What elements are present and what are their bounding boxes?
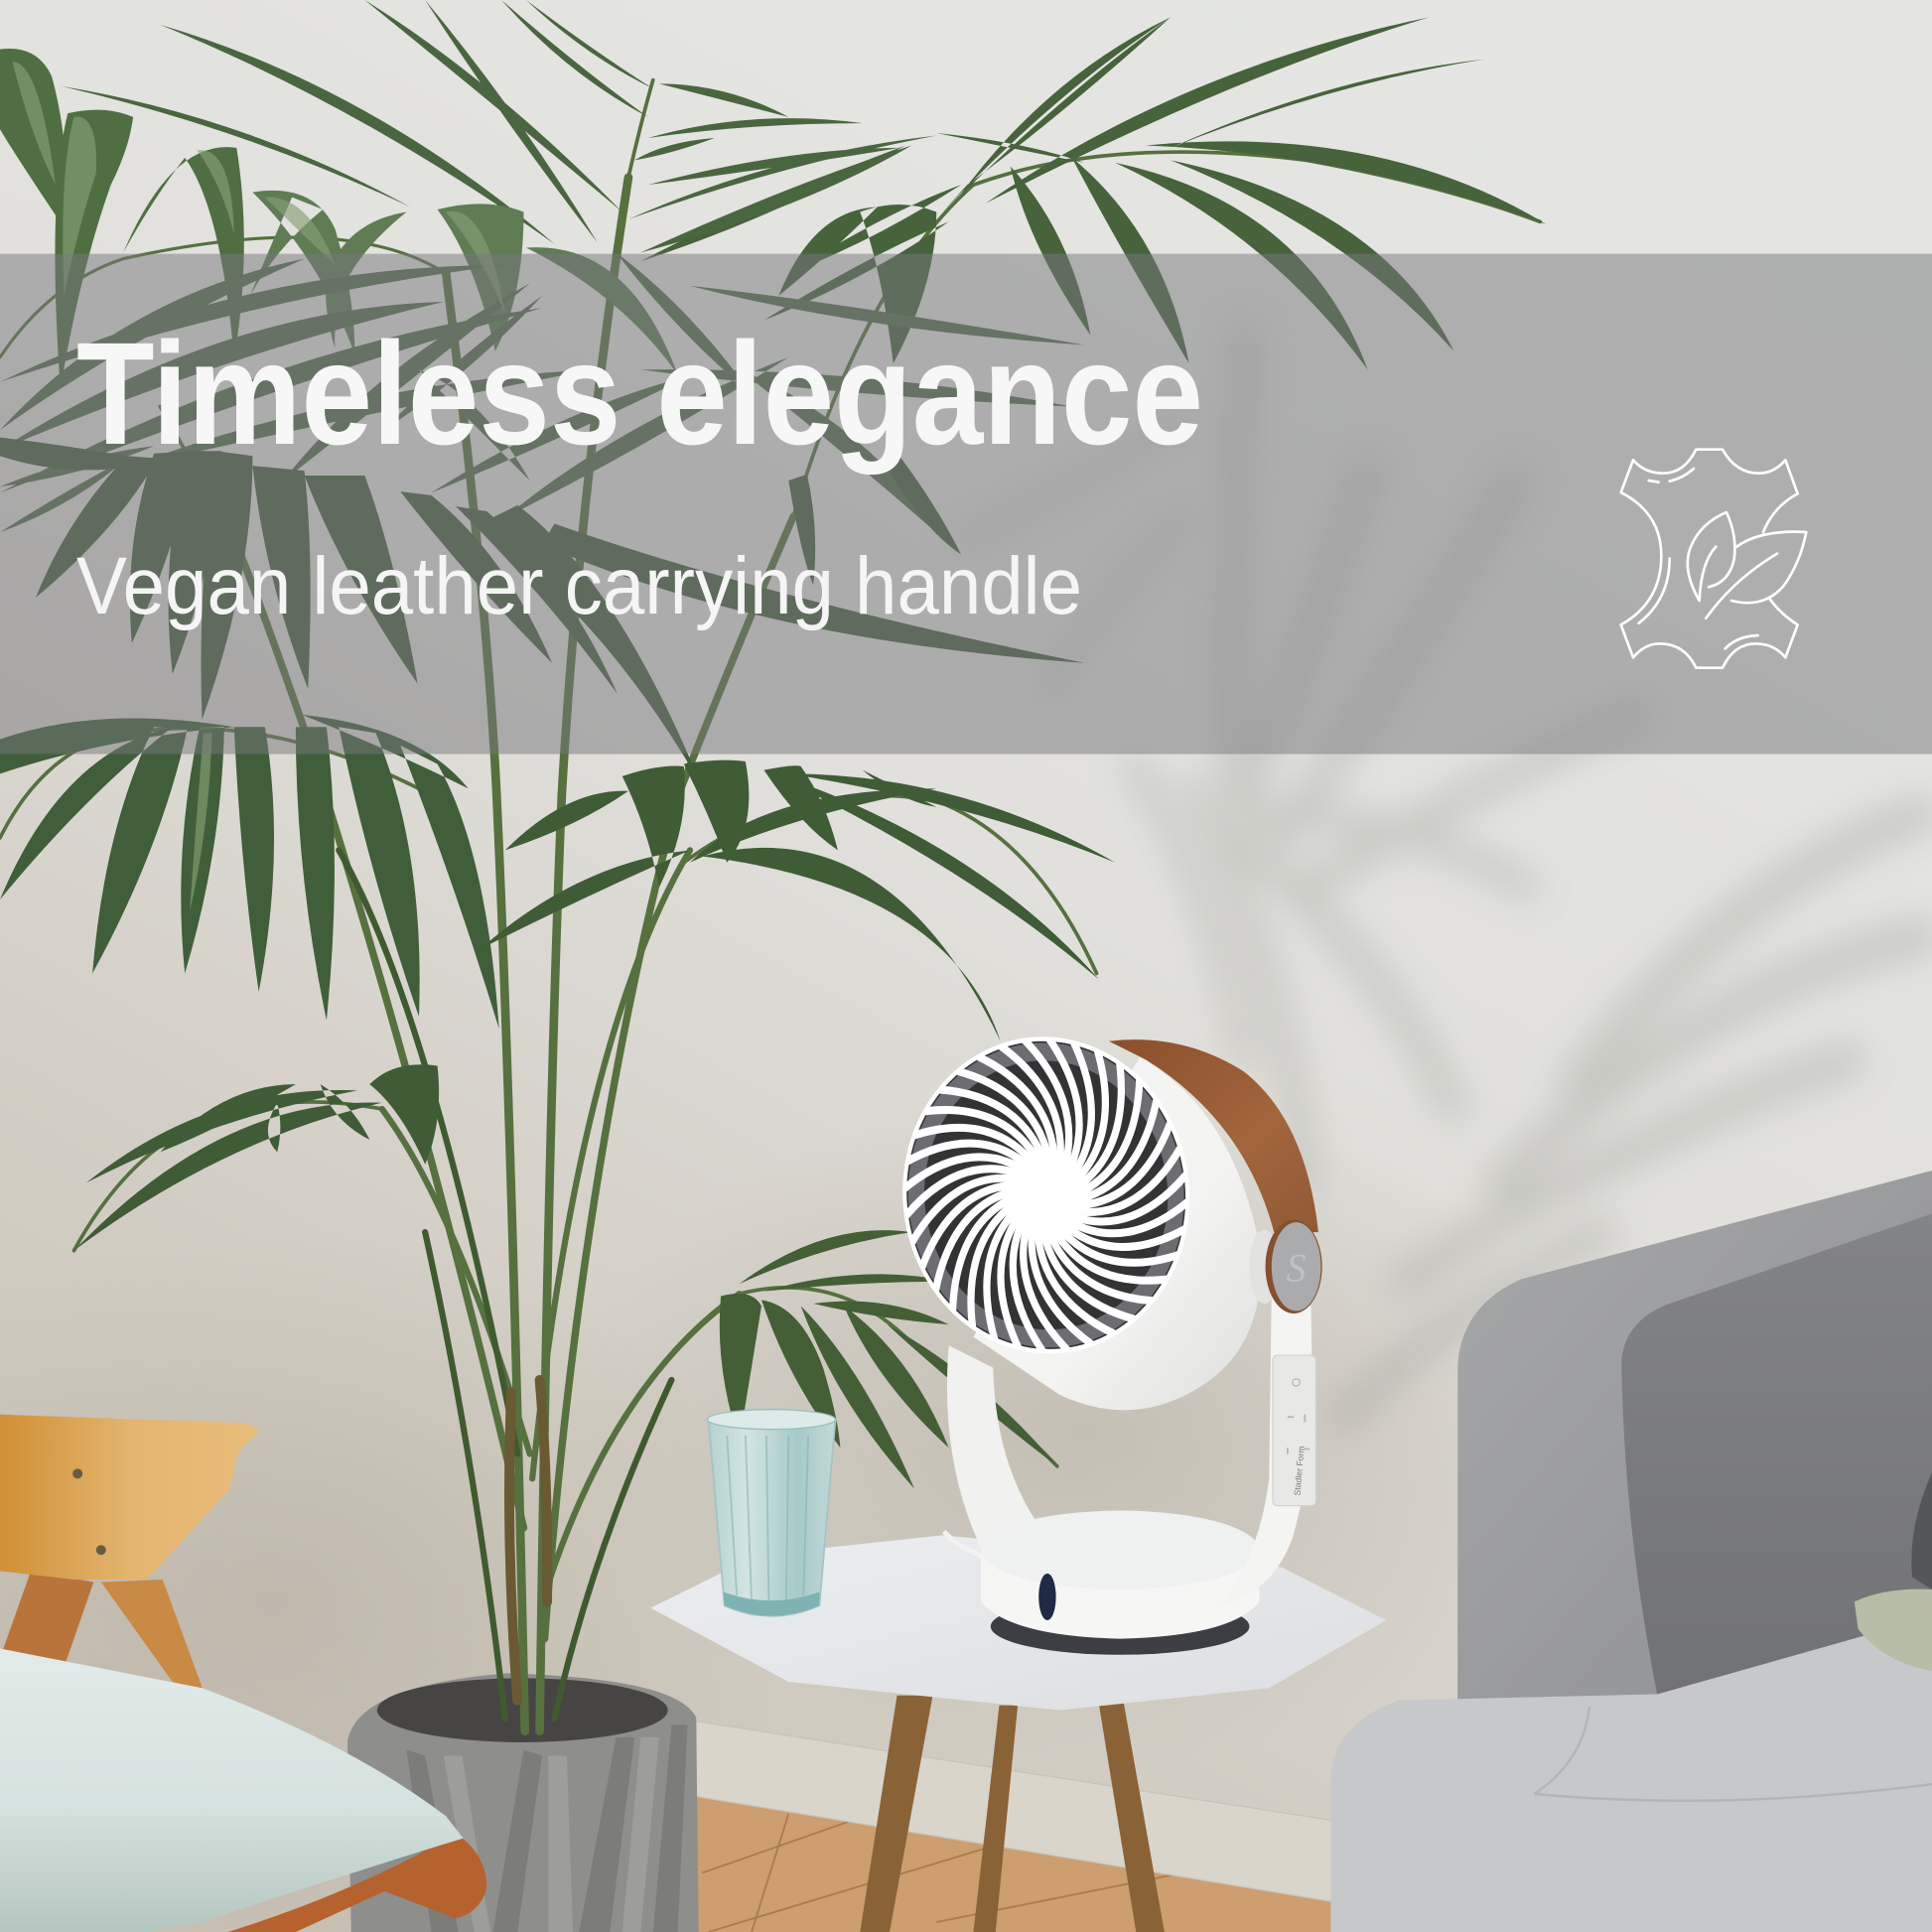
water glass	[707, 1410, 835, 1616]
frond: low centre	[720, 1230, 1057, 1488]
chair	[0, 1415, 486, 1932]
icon: leather hide with leaves	[1621, 450, 1806, 668]
base	[981, 1550, 1259, 1639]
leather strap	[1109, 1039, 1318, 1232]
sofa	[1330, 1171, 1932, 1932]
frond: top right	[640, 17, 1547, 369]
remote control	[1273, 1355, 1315, 1506]
frond: upper left droop	[0, 49, 244, 389]
frond: low left	[73, 1064, 439, 1251]
palm shadow on wall	[961, 333, 1922, 1417]
right arm	[1217, 1294, 1313, 1608]
fan	[880, 1015, 1322, 1655]
base dark foot	[991, 1598, 1249, 1655]
frond: mid left droop	[0, 438, 1084, 785]
indicator light	[1038, 1574, 1056, 1620]
side table	[650, 1535, 1386, 1932]
left arm	[947, 1345, 1042, 1558]
power cord	[944, 1532, 986, 1558]
frond: upper left sweep	[0, 252, 1084, 554]
chair frame	[228, 1834, 486, 1932]
pillow	[0, 1649, 464, 1932]
floor	[696, 1796, 1333, 1932]
table legs	[860, 1696, 1165, 1932]
fan grille	[902, 1036, 1189, 1354]
frond: lower left fan	[0, 715, 499, 1029]
grey band	[0, 254, 1932, 755]
leaflet highlights	[12, 62, 505, 911]
remote control: Stadler Form	[1292, 1446, 1307, 1496]
strap hub	[1249, 1220, 1322, 1313]
palm stems	[0, 80, 1540, 1731]
subtitle: Vegan leather carrying handle	[76, 541, 1082, 631]
palm plant	[0, 0, 1547, 1731]
strap hub: S	[1287, 1247, 1307, 1291]
plant pot	[347, 1673, 699, 1932]
skirting board	[696, 1722, 1337, 1902]
chair legs	[2, 1571, 204, 1691]
title: Timeless elegance	[76, 313, 1203, 476]
motor housing	[973, 1057, 1261, 1410]
frond: centre right	[481, 760, 1115, 1041]
table top	[650, 1535, 1386, 1711]
chair back	[0, 1415, 257, 1580]
frond: top centre	[62, 0, 936, 252]
